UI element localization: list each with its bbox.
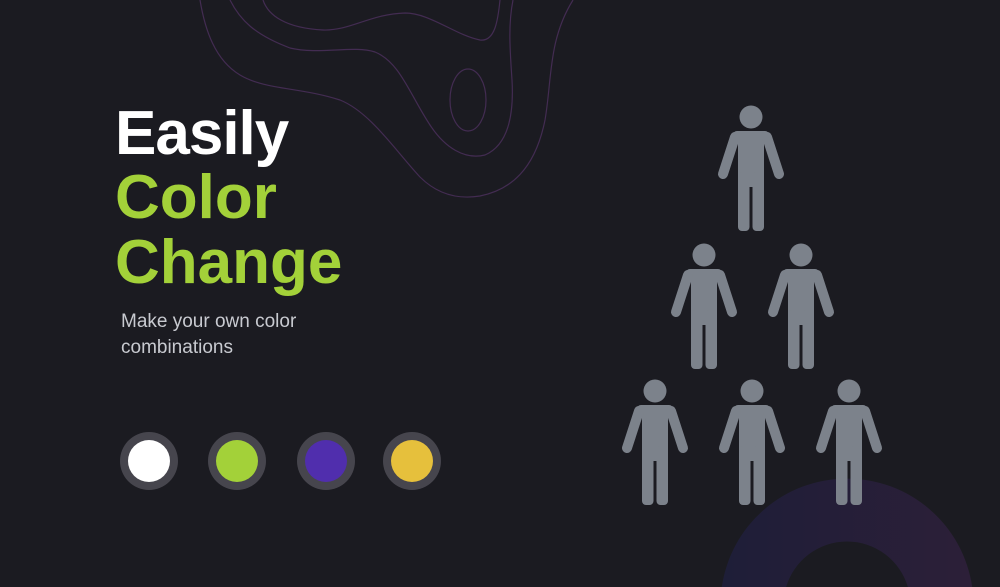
person row 3 right	[821, 380, 877, 505]
decorative ring	[722, 479, 972, 587]
title	[115, 99, 342, 297]
person row 3 middle	[724, 380, 780, 505]
title: Easily	[115, 99, 288, 168]
person row 1	[723, 106, 779, 231]
color swatches	[120, 432, 441, 490]
person row 3 left	[627, 380, 683, 505]
title: Change	[115, 228, 342, 297]
subtitle: Make your own color combinations	[121, 311, 296, 358]
title: Color	[115, 163, 277, 232]
person row 2 right	[773, 244, 829, 369]
person row 2 left	[676, 244, 732, 369]
